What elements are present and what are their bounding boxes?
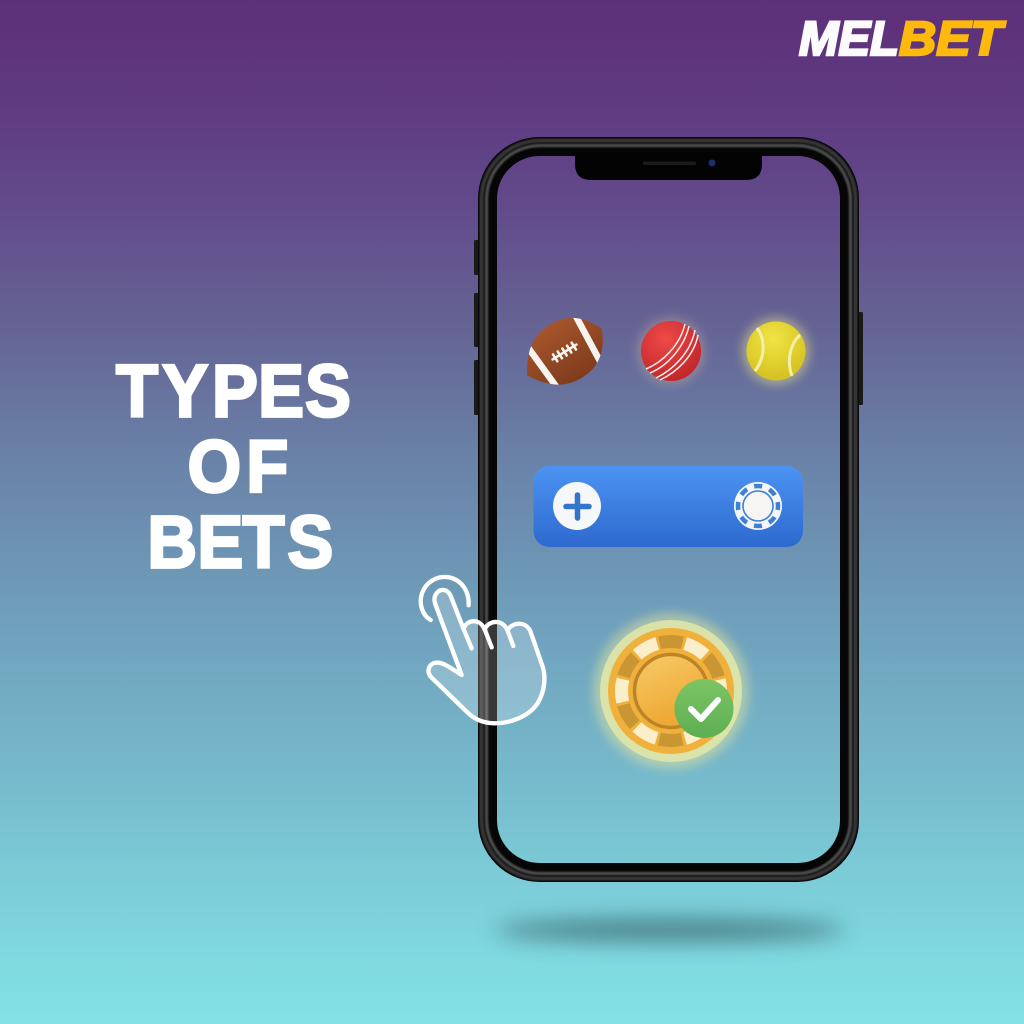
phone frame [482,140,856,878]
title: Types of Bets: BETS [147,501,333,584]
icon: poker chip [734,482,782,530]
title: Types of Bets [116,350,351,584]
sports balls row [527,312,815,390]
green check badge [674,679,734,738]
gold chip [608,628,734,754]
phone shadow [495,918,845,942]
logo: MELBET [799,13,1006,66]
icon: tennis ball [742,317,810,385]
gold chip with check [593,613,749,769]
icon: plus button [553,482,601,530]
icon: cricket ball [637,317,705,385]
icon: tapping hand [421,577,544,723]
icon: american football [527,318,603,385]
phone [474,140,863,878]
camera [708,160,716,166]
title: Types of Bets: OF [188,426,288,509]
speaker [643,162,696,165]
logo: MELBET: MEL [799,13,899,66]
notch [575,152,762,180]
chip glow [593,613,749,769]
logo: MELBET: BET [899,13,1006,66]
side buttons [474,240,863,415]
blue bet bar [534,466,803,547]
title: Types of Bets: TYPES [116,350,351,433]
